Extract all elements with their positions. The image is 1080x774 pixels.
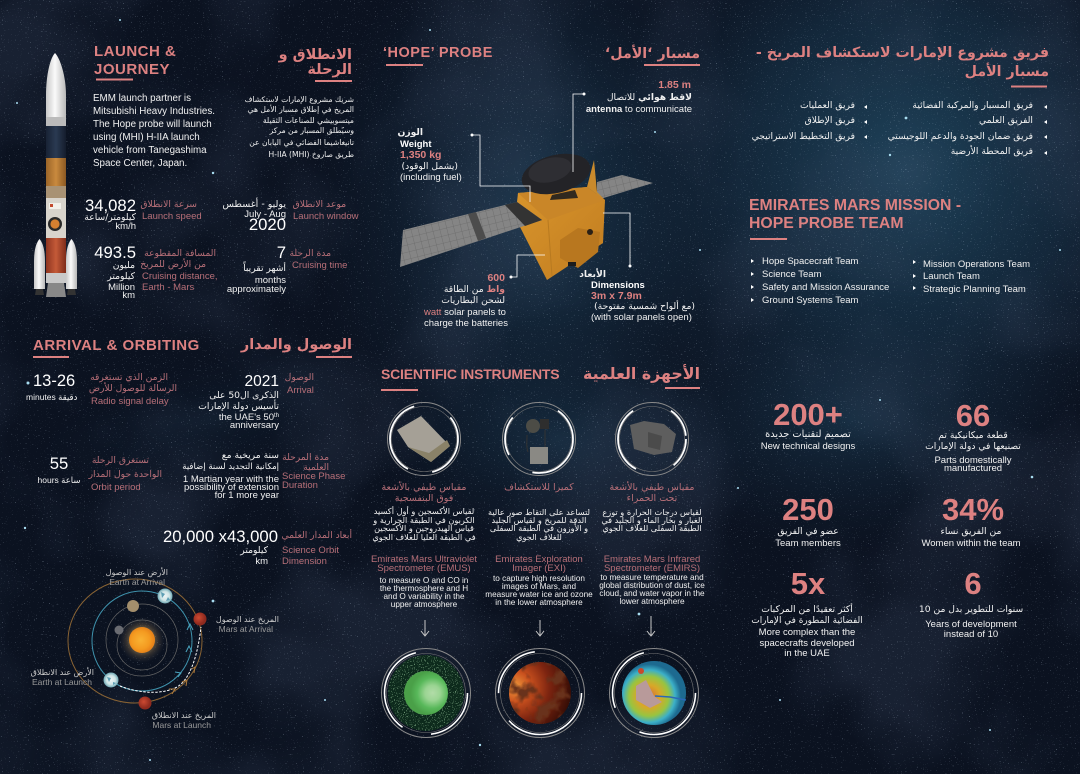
stat: 34 percent women: Women within the team [921, 538, 1021, 549]
stat: launch window: موعد الانطلاق [293, 199, 346, 210]
stat: 6 years of development: instead of 10 [944, 629, 998, 640]
callout: dimensions [579, 213, 695, 323]
stat: science orbit dimension [163, 527, 352, 567]
callout: weight: Weight [400, 139, 432, 150]
stat: orbit period [38, 454, 162, 493]
heading: launch and journey: JOURNEY [94, 61, 170, 78]
stat: cruising distance: Million [108, 282, 135, 293]
stat: 6 years of development: Years of development [925, 619, 1017, 630]
instrument: EXI: و الأوزون في الطبقة السفلى [490, 523, 588, 533]
stat: science phase duration: Science Phase [282, 471, 345, 482]
stat: 250 team members [775, 492, 841, 549]
stat: science phase duration: سنة مريخية مع [222, 450, 279, 461]
text block: launch partner: Mitsubishi Heavy Industries. [93, 106, 215, 117]
heading: team arabic: فريق مشروع الإمارات لاستكشاف المريخ - [756, 45, 1049, 61]
icon: EMIRS instrument [616, 402, 688, 476]
stat: 66 parts manufactured: قطعة ميكانيكية تم [938, 430, 1008, 441]
stat: cruising distance: km [122, 290, 135, 301]
stat: launch window: يوليو - أغسطس [222, 197, 286, 210]
instrument: EMUS: the thermosphere and H [380, 584, 468, 593]
stat: launch speed: 34,082 [85, 196, 136, 215]
heading: team english [749, 197, 961, 240]
stat: 250 team members: 250 [782, 492, 834, 527]
stat: cruising distance [94, 243, 218, 301]
stat: science phase duration: العلمية [303, 462, 329, 473]
text block: launch partner: المريخ في إطلاق مسبار الأمل هي [248, 104, 354, 114]
solar panel left [400, 202, 542, 267]
list: english team list: Launch Team [923, 271, 980, 282]
instrument: EMIRS: تحت الحمراء [627, 493, 678, 504]
stat: orbit period: تستغرق الرحلة [92, 455, 149, 466]
stat: radio signal delay: الزمن الذي تستغرقه [90, 372, 168, 383]
stat: 200+ new technical designs: New technical designs [761, 441, 856, 452]
stat: science phase duration: مدة المرحلة [282, 452, 329, 463]
icon: EXI camera [502, 402, 576, 476]
stat: 5x more complex: More complex than the [759, 627, 855, 638]
stat: arrival: anniversary [230, 420, 279, 431]
text block: launch partner: شريك مشروع الإمارات لاستكشاف [245, 95, 354, 104]
stat: 66 parts manufactured: 66 [956, 398, 990, 433]
stat: orbit period: 55 [50, 454, 68, 473]
instrument: EMUS: الكربون في الطبقة الحرارية و [372, 515, 475, 525]
stat: 34 percent women [921, 492, 1021, 549]
callout: power: charge the batteries [424, 318, 508, 329]
instrument: EMIRS: الغبار و بخار الماء و الجليد في [601, 515, 703, 525]
illustration: hope probe spacecraft [400, 147, 653, 280]
stat: science orbit dimension: km [255, 556, 268, 567]
stat: launch speed: km/h [115, 221, 136, 232]
stat: science phase duration: for 1 more year [215, 490, 279, 501]
instrument: EMIRS: Spectrometer (EMIRS) [604, 563, 700, 574]
chart: orbit diagram: المريخ عند الوصول [216, 615, 279, 624]
stat: orbit period: Orbit period [91, 482, 141, 493]
stat: radio signal delay: Radio signal delay [91, 396, 169, 407]
text block: launch partner: طريق صاروخ H-IIA (MHI) [269, 150, 354, 159]
rocket illustration [34, 53, 77, 297]
callout: dimensions: الأبعاد [579, 268, 606, 280]
stat: 6 years of development: 6 [964, 566, 982, 601]
list: english team list [751, 256, 1030, 306]
stat: 250 team members: Team members [775, 538, 841, 549]
text block: launch partner: تانيغاشيما الفضائي في اليابان عن [249, 138, 354, 147]
list: arabic team list: فريق التخطيط الاستراتيجي [752, 131, 855, 142]
stat: cruising distance: مليون [113, 260, 135, 271]
instrument: EMUS: لقياس الأكسجين و أول أكسيد [374, 506, 474, 516]
instrument: EMUS: to measure O and CO in [380, 576, 469, 585]
instrument: EXI: لتساعد على التقاط صور عالية [488, 507, 590, 517]
heading: team arabic: مسبار الأمل [965, 62, 1049, 80]
callout: dimensions: (مع ألواح شمسية مفتوحة) [594, 300, 695, 312]
chart: orbit diagram: الأرض عند الانطلاق [31, 667, 94, 677]
instrument: EXI: Imager (EXI) [512, 563, 566, 574]
stat: launch window: July - Aug [244, 209, 286, 220]
solar panel right [597, 175, 653, 200]
heading: launch and journey: LAUNCH & [94, 43, 176, 60]
callout: antenna: لاقط هوائي للاتصال [607, 92, 692, 103]
heading: launch and journey [94, 43, 352, 82]
stat: cruising time: 7 [277, 243, 286, 262]
stat: 66 parts manufactured: تصنيعها في دولة الإمارات [925, 441, 1021, 452]
chart: orbit diagram: Earth at Launch [32, 677, 92, 687]
instrument: EXI: الدقة للمريخ و لقياس الجليد [492, 515, 586, 525]
stat: launch speed [84, 196, 202, 232]
stat: arrival: تأسيس دولة الإمارات [198, 399, 279, 412]
text block: launch partner: Space Center, Japan. [93, 158, 187, 169]
stat: launch window: 2020 [249, 215, 286, 234]
stat: orbit period: hours ساعة [38, 475, 80, 485]
stat: 200+ new technical designs: 200+ [773, 397, 843, 432]
chart: orbit diagram: Mars at Launch [152, 720, 211, 730]
list: arabic team list [752, 100, 1047, 157]
callout: weight: الوزن [398, 127, 423, 138]
stat: 66 parts manufactured [925, 398, 1021, 474]
stat: cruising distance: المسافة المقطوعة [144, 248, 216, 259]
list: arabic team list: فريق العمليات [800, 100, 855, 111]
stat: arrival [198, 372, 314, 431]
high gain antenna dish [517, 147, 595, 201]
stat: cruising time: Cruising time [292, 260, 347, 271]
stat: arrival: الذكرى ال50 على [209, 390, 279, 401]
callout: power: لشحن البطاريات [441, 295, 505, 306]
list: arabic team list: فريق الإطلاق [805, 115, 855, 126]
stat: launch speed: Launch speed [142, 211, 202, 222]
text block: launch partner: vehicle from Tanegashima [93, 145, 207, 156]
list: arabic team list: فريق ضمان الجودة والدعم اللوجيستي [888, 131, 1033, 142]
heading: hope probe [383, 44, 700, 66]
heading: arrival and orbiting: الوصول والمدار [240, 337, 352, 353]
callout: dimensions: (with solar panels open) [591, 312, 692, 323]
stat: 6 years of development [919, 566, 1023, 640]
stat: 34 percent women: من الفريق نساء [941, 526, 1002, 537]
stat: radio signal delay [26, 372, 177, 407]
instrument: EMUS: مقياس طيفي بالأشعة [381, 481, 467, 493]
instrument: EXI: كميرا للاستكشاف [504, 482, 574, 493]
callout: dimensions: Dimensions [591, 280, 645, 291]
instrument: EXI: measure water ice and ozone [485, 590, 593, 599]
instrument: EMIRS [599, 402, 705, 606]
stat: cruising time: approximately [227, 284, 286, 295]
stat: cruising time [227, 243, 347, 295]
heading: launch and journey: الرحلة [307, 62, 352, 78]
list: english team list: Hope Spacecraft Team [762, 256, 859, 267]
stat: 66 parts manufactured: Parts domestically [934, 455, 1012, 466]
heading: arrival and orbiting [33, 337, 352, 358]
callout: antenna: 1.85 m [658, 79, 691, 91]
instrument: EMIRS: لقياس درجات الحرارة و توزع [602, 507, 702, 517]
callout: power: 600 [487, 272, 505, 284]
stat: cruising distance: كيلومتر [106, 271, 136, 282]
instrument: EMIRS: الطبقة السفلى للغلاف الجوي [602, 523, 702, 533]
instrument: EMUS: في الطبقة العليا للغلاف الجوي [372, 532, 476, 542]
stat: 66 parts manufactured: manufactured [944, 463, 1002, 474]
list: english team list: Strategic Planning Team [923, 284, 1026, 295]
heading: hope probe: ‘HOPE’ PROBE [383, 45, 493, 61]
stat: 5x more complex: 5x [791, 566, 826, 601]
stat: 5x more complex [751, 566, 863, 659]
instrument: EMIRS: مقياس طيفي بالأشعة [609, 481, 695, 493]
text block: launch partner: The Hope probe will launch [93, 119, 212, 130]
instrument: EMIRS: cloud, and water vapor in the [599, 589, 705, 598]
heading: team arabic [756, 45, 1049, 88]
stat: science orbit dimension: أبعاد المدار العلمي [281, 529, 352, 541]
stat: science phase duration: Duration [282, 480, 318, 491]
stat: radio signal delay: minutes دقيقة [26, 392, 78, 402]
instrument: EXI: to capture high resolution [493, 574, 585, 583]
list: english team list: Mission Operations Team [923, 259, 1030, 270]
heading: launch and journey: الانطلاق و [278, 47, 352, 63]
heading: scientific instruments [381, 364, 700, 391]
stat: arrival: 2021 [245, 373, 279, 390]
instrument: EXI [485, 402, 593, 607]
instrument: EXI: للغلاف الجوي [516, 532, 562, 542]
stat: 200+ new technical designs [761, 397, 856, 452]
stat: science phase duration: إمكانية التجديد لسنة إضافية [182, 462, 279, 472]
callout: weight: (including fuel) [400, 172, 462, 183]
arrows: instruments to planets [421, 616, 655, 636]
instrument: EMIRS: to measure temperature and [600, 573, 704, 582]
list: arabic team list: فريق المسبار والمركبة الفضائية [912, 100, 1033, 111]
callout: power: واط من الطاقة [444, 284, 505, 295]
stat: 5x more complex: الفضائية المطورة في الإمارات [751, 616, 863, 626]
callout: antenna: antenna to communicate [586, 104, 692, 115]
stat: science orbit dimension: كيلومتر [239, 545, 269, 556]
stat: arrival: the UAE's 50 [219, 412, 274, 423]
list: english team list: Ground Systems Team [762, 295, 859, 306]
instrument: EMUS: قياس الهيدروجين و الأكسجين [374, 523, 474, 533]
stat: 5x more complex: spacecrafts developed [759, 638, 855, 649]
instrument: EMIRS: Emirates Mars Infrared [604, 554, 700, 565]
instrument: EMUS: and O variability in the [383, 592, 465, 601]
heading: hope probe: مسبار ‘الأمل‘ [605, 44, 700, 62]
list: english team list: Science Team [762, 269, 822, 280]
instrument: EXI: in the lower atmosphere [495, 598, 583, 607]
stat: science orbit dimension: Science Orbit [282, 545, 339, 556]
callout: weight [398, 127, 530, 202]
stat: 250 team members: عضو في الفريق [777, 526, 839, 537]
stat: science orbit dimension: Dimension [282, 556, 327, 567]
stat: 34 percent women: 34% [942, 492, 1004, 527]
planet: mars infrared map [610, 648, 698, 738]
heading: team english: EMIRATES MARS MISSION - [749, 197, 961, 214]
stat: cruising time: months [255, 275, 286, 286]
stat: launch window: Launch window [293, 211, 359, 222]
list: arabic team list: الفريق العلمي [979, 115, 1033, 126]
list: english team list: Safety and Mission Assurance [762, 282, 889, 293]
text block: launch partner: وسيُطلق المسبار من مركز [269, 126, 354, 135]
stat: orbit period: الواحدة حول المدار [88, 469, 162, 480]
chart: orbit diagram: الأرض عند الوصول [106, 567, 168, 577]
stat: science phase duration: 1 Martian year with the [183, 474, 279, 485]
chart: orbit diagram: المريخ عند الانطلاق [152, 711, 216, 720]
stat: arrival: th [274, 413, 279, 419]
text block: launch partner [93, 93, 354, 169]
callout: weight: 1,350 kg [400, 149, 441, 161]
stat: arrival: Arrival [287, 385, 314, 396]
stat: 6 years of development: سنوات للتطوير بدل من 10 [919, 604, 1023, 615]
heading: scientific instruments: SCIENTIFIC INSTRUMENTS [381, 366, 559, 382]
stat: cruising time: مدة الرحلة [289, 248, 331, 259]
instrument: EXI: Emirates Exploration [495, 554, 583, 565]
stat: science phase duration: possibility of extension [184, 482, 279, 493]
instrument: EMUS: Emirates Mars Ultraviolet [371, 554, 477, 565]
stat: launch window [222, 197, 359, 234]
heading: arrival and orbiting: ARRIVAL & ORBITING [33, 337, 200, 354]
stat: launch speed: كيلومتر/ساعة [84, 212, 137, 223]
text block: launch partner: EMM launch partner is [93, 93, 191, 104]
stat: science orbit dimension: 20,000 x43,000 [163, 527, 278, 546]
stat: launch speed: سرعة الانطلاق [140, 199, 197, 210]
stat: cruising distance: Earth - Mars [142, 282, 195, 293]
stat: arrival: الوصول [285, 372, 314, 383]
callout: antenna [573, 79, 692, 172]
heading: team english: HOPE PROBE TEAM [749, 215, 903, 232]
callout: power [423, 255, 545, 329]
icon: EMUS instrument [388, 402, 460, 476]
list: arabic team list: فريق المحطة الأرضية [951, 145, 1033, 157]
chart: orbit diagram: Mars at Arrival [219, 624, 273, 634]
instrument: EXI: images of Mars, and [502, 582, 577, 591]
instrument: EMUS: فوق البنفسجية [395, 493, 453, 504]
stat: 5x more complex: أكثر تعقيدًا من المركبات [761, 603, 853, 615]
callout: power: watt solar panels to [423, 307, 506, 318]
instrument: EMUS: Spectrometer (EMUS) [377, 563, 471, 574]
text block: launch partner: ميتسوبيشي للصناعات الثقيلة [263, 116, 354, 125]
stat: radio signal delay: الرسالة للوصول للأرض [89, 382, 177, 394]
stat: 5x more complex: in the UAE [784, 648, 830, 659]
stat: cruising distance: Cruising distance, [142, 271, 218, 282]
chart: orbit diagram: Earth at Arrival [109, 577, 165, 587]
stat: 200+ new technical designs: تصميم لتقنيات جديدة [765, 429, 851, 440]
instrument: EMUS: upper atmosphere [391, 600, 458, 609]
stat: science phase duration [182, 450, 345, 501]
instrument: EMIRS: lower atmosphere [619, 597, 685, 606]
planet: mars red view [496, 648, 584, 738]
heading: scientific instruments: الأجهزة العلمية [583, 364, 700, 383]
stat: cruising distance: 493.5 [94, 243, 136, 262]
text block: launch partner: using (MHI) H-IIA launch [93, 132, 200, 143]
instrument: EMIRS: global distribution of dust, ice [599, 581, 705, 590]
stat: radio signal delay: 13-26 [33, 372, 75, 390]
callout: dimensions: 3m x 7.9m [591, 290, 642, 302]
callout: weight: (يشمل الوقود) [402, 161, 458, 172]
stat: cruising time: أشهر تقريباً [242, 261, 286, 274]
stat: cruising distance: من الأرض للمريخ [140, 258, 206, 270]
gold spacecraft body [517, 160, 605, 280]
instrument: EMUS [371, 402, 477, 609]
planet: green ultraviolet view [382, 648, 470, 738]
chart: orbit diagram [31, 567, 279, 730]
